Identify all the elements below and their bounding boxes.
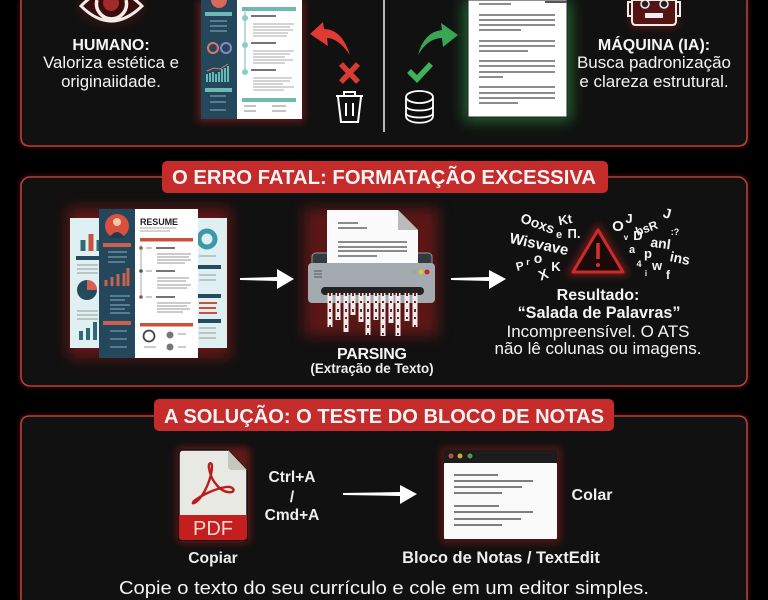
text: máquina: e clareza estrutural. — [579, 72, 729, 91]
text: humano: HUMANO: — [72, 37, 150, 54]
panel: a solução — [21, 399, 747, 600]
word salad: p — [644, 246, 652, 261]
word salad: Ooxs — [519, 210, 557, 237]
arrow: accepted — [418, 23, 458, 55]
word salad: Kt — [557, 211, 574, 228]
panel: humano vs máquina — [21, 0, 747, 146]
text: parsing: PARSING — [337, 346, 407, 363]
text: máquina: Busca padronização — [577, 53, 731, 72]
text: ctrl+a: / — [290, 489, 295, 506]
icon: database — [406, 91, 433, 123]
word salad: f — [666, 268, 671, 282]
text: resultado: Resultado: — [557, 287, 639, 304]
text: colar: Colar — [572, 487, 612, 504]
text: humano: Valoriza estética e — [43, 53, 179, 72]
text: resultado: “Salada de Palavras” — [518, 304, 680, 322]
word salad: r — [526, 257, 530, 267]
word salad: 4 — [636, 259, 642, 269]
word salad: w — [651, 258, 663, 273]
word salad: J — [661, 204, 673, 222]
arrow: to notepad — [343, 485, 417, 504]
icon: warning triangle — [573, 230, 623, 272]
word salad: П. — [568, 226, 580, 241]
icon: trash — [336, 92, 363, 122]
text: ctrl+a — [265, 469, 319, 524]
heading pill: erro fatal: O ERRO FATAL: FORMATAÇÃO EXCESSIVA — [172, 166, 596, 189]
text: humano: originaiidade. — [61, 72, 161, 91]
word salad — [508, 204, 692, 283]
word salad: bsR — [634, 218, 660, 239]
icon: pdf file — [177, 447, 250, 543]
text: resultado: não lê colunas ou imagens. — [495, 339, 701, 358]
text: máquina: MÁQUINA (IA): — [598, 35, 710, 54]
text: bloco de notas: Bloco de Notas / TextEdit — [402, 549, 600, 567]
icon: shredder — [304, 208, 438, 336]
text: resultado — [495, 287, 701, 358]
word salad: e — [556, 229, 562, 241]
word salad: a — [629, 244, 636, 256]
text: ctrl+a: Ctrl+A — [269, 469, 315, 486]
text: parsing: (Extração de Texto) — [310, 361, 434, 376]
ats friendly document — [464, 0, 571, 121]
icon: red cross — [341, 64, 358, 82]
resume stack: RESUME — [140, 217, 178, 227]
word salad: ins — [668, 248, 692, 268]
arrow: rejected — [310, 22, 350, 55]
icon: robot — [628, 0, 680, 28]
text: humano — [43, 37, 179, 91]
word salad: P — [514, 258, 526, 274]
word salad: O — [612, 218, 624, 235]
text: copiar: Copiar — [188, 550, 238, 567]
creative resume — [198, 0, 304, 122]
icon: notepad window — [441, 447, 561, 543]
icon: eye — [81, 0, 142, 21]
heading pill: erro fatal — [162, 161, 608, 193]
text: resultado: Incompreensível. O ATS — [507, 322, 689, 341]
text: máquina — [577, 35, 731, 91]
word salad: J — [625, 211, 633, 226]
text: instruction: Copie o texto do seu currículo e cole em um editor simples. — [119, 577, 649, 598]
panel: o erro fatal — [21, 161, 747, 386]
word salad: v — [624, 233, 629, 242]
resume stack — [68, 208, 230, 358]
text: parsing — [310, 346, 434, 376]
heading pill: solução: A SOLUÇÃO: O TESTE DO BLOCO DE NOTAS — [164, 405, 604, 428]
word salad: o — [534, 250, 542, 266]
icon: pdf file: PDF — [193, 518, 233, 540]
word salad: K — [551, 259, 561, 274]
word salad: i — [645, 269, 647, 278]
word salad: :? — [671, 227, 679, 237]
arrow: to parsing — [240, 269, 294, 289]
word salad: anl — [650, 234, 672, 252]
word salad: D — [633, 228, 643, 243]
word salad: Wisvave — [508, 230, 570, 259]
icon: green check — [409, 64, 431, 79]
arrow: to result — [451, 270, 506, 289]
text: ctrl+a: Cmd+A — [265, 507, 319, 524]
word salad: X — [536, 265, 551, 283]
